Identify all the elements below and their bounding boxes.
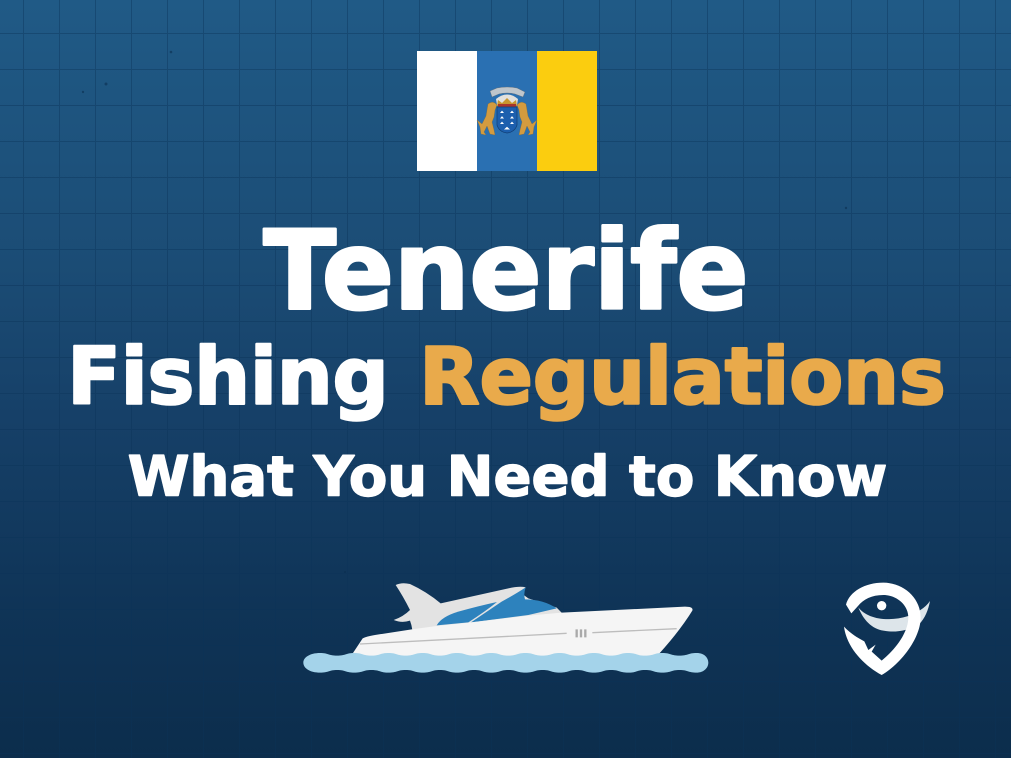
logo fish body (844, 583, 921, 675)
logo band (858, 601, 930, 632)
yacht hull (348, 607, 693, 660)
title: Tenerife: Tenerife (264, 208, 748, 334)
water wave (303, 653, 708, 673)
yacht side window (437, 602, 497, 625)
logo: fish hook (844, 583, 930, 675)
yacht cabin glass (471, 587, 557, 622)
hull stripe and vents (360, 629, 677, 644)
icon: yacht on water (303, 583, 708, 673)
heading word: Fishing: Fishing (67, 332, 389, 422)
icon: Canary Islands flag (417, 51, 597, 171)
heading word: Regulations: Regulations (419, 332, 946, 422)
icon: coat of arms (477, 87, 537, 135)
yacht superstructure (394, 583, 562, 630)
heading: Fishing Regulations (67, 332, 946, 422)
logo eye (877, 601, 886, 610)
subtitle: What You Need to Know (128, 444, 887, 508)
